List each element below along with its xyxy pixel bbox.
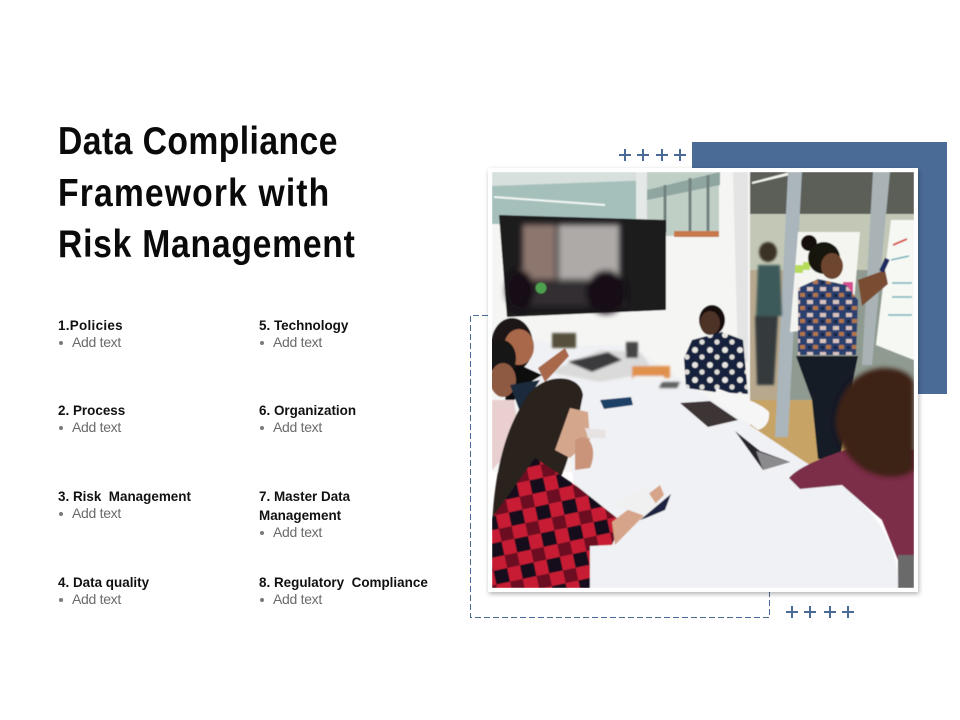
- photo: meeting room: [488, 172, 914, 588]
- seated woman, floral top: [684, 305, 748, 394]
- woman right, curly hair: [789, 368, 914, 588]
- whiteboard sheet behind presenter: [790, 232, 860, 332]
- list item 4: [58, 574, 149, 607]
- photo frame: [488, 168, 918, 592]
- list item 2: [58, 402, 125, 435]
- chair: [716, 388, 769, 430]
- list item 6: [259, 402, 356, 435]
- title: Framework with: [58, 172, 330, 214]
- list item 5: 5. Technology: [259, 316, 348, 332]
- list item 6: Add text: [273, 419, 322, 435]
- title: Data Compliance: [58, 120, 338, 163]
- top plus marks: [619, 149, 686, 161]
- wall monitor: [499, 215, 666, 317]
- list item 4: Add text: [72, 591, 121, 607]
- glass office upper left: [492, 180, 636, 224]
- monitor badge: [536, 282, 546, 294]
- dashed outline frame: [470, 316, 770, 618]
- table clutter: [548, 333, 680, 388]
- person behind glass: [755, 242, 782, 385]
- list item 1: Add text: [72, 334, 121, 350]
- table items: notebook, laptops: [585, 397, 790, 470]
- title: [58, 120, 356, 266]
- left women group: [488, 318, 569, 470]
- woman in red plaid: [492, 378, 671, 588]
- list item 7: Add text: [273, 524, 322, 540]
- list item 8: Add text: [273, 591, 322, 607]
- title: Risk Management: [58, 223, 356, 266]
- list item 1: 1.Policies: [58, 316, 123, 332]
- list item 5: [259, 316, 348, 350]
- list item 2: Add text: [72, 419, 121, 435]
- list item 6: 6. Organization: [259, 402, 356, 418]
- list item 7: [259, 488, 350, 540]
- table: [490, 330, 898, 588]
- picture composition: [470, 142, 947, 618]
- list item 3: Add text: [72, 505, 121, 521]
- list item 3: 3. Risk Management: [58, 488, 191, 504]
- list item 8: 8. Regulatory Compliance: [259, 574, 428, 590]
- presenter: [796, 235, 890, 459]
- list item 3: [58, 488, 191, 521]
- list item 4: 4. Data quality: [58, 574, 149, 590]
- list item 8: [259, 574, 428, 607]
- list item 2: 2. Process: [58, 402, 125, 418]
- blue backdrop rectangle: [692, 142, 947, 394]
- bottom plus marks: [786, 606, 854, 618]
- wall: [492, 172, 752, 472]
- list item 7: 7. Master Data: [259, 488, 350, 504]
- right flip chart: [876, 220, 914, 360]
- list item 1: [58, 316, 123, 350]
- door frames: [733, 172, 748, 362]
- list item 5: Add text: [273, 334, 322, 350]
- glass corridor: [789, 269, 914, 450]
- list item 7: Management: [259, 506, 341, 522]
